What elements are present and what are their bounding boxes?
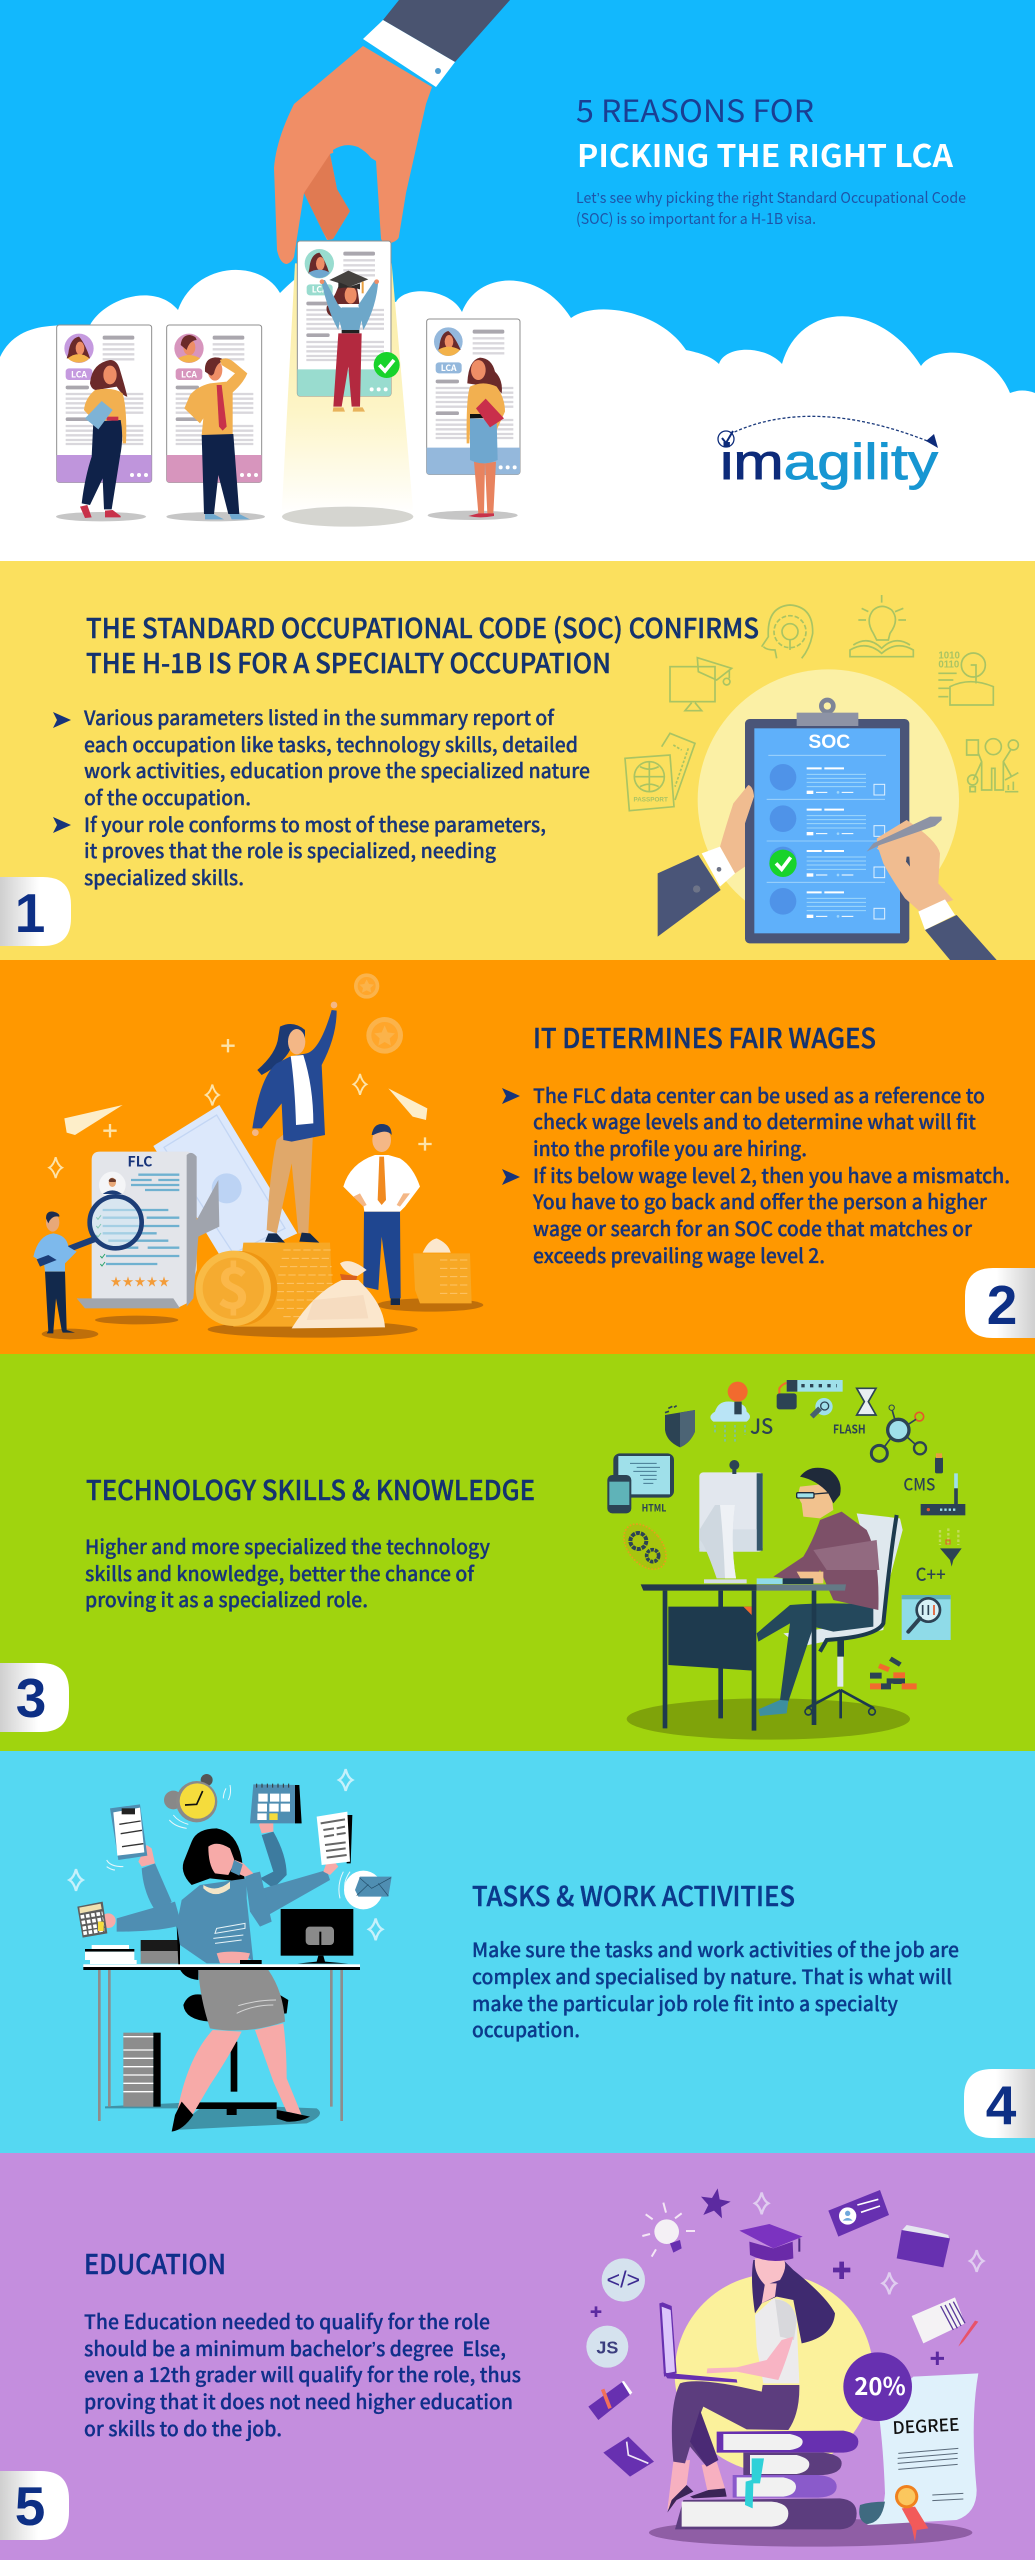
subtitle: Let’s see why picking the right Standard Occupational Code <box>576 187 966 208</box>
body text <box>85 1531 490 1613</box>
card 1 with woman <box>56 325 152 521</box>
body text: skills and knowledge, better the chance of <box>85 1558 475 1587</box>
banknote <box>153 1105 297 1267</box>
imagility logo <box>718 416 938 490</box>
chair <box>783 1513 903 1718</box>
body text: even a 12th grader will qualify for the role, thus <box>84 2359 521 2388</box>
heading: THE H-1B IS FOR A SPECIALTY OCCUPATION <box>86 642 611 681</box>
SOC illustration <box>625 595 1018 960</box>
man <box>757 1468 879 1716</box>
FLC document: FLC <box>128 1152 152 1172</box>
tech icons: JS <box>750 1409 773 1439</box>
20 percent badge: 20% <box>854 2367 906 2402</box>
bullet list: exceeds prevailing wage level 2. <box>533 1240 825 1269</box>
degree scroll <box>859 2373 978 2542</box>
body text <box>84 2306 521 2442</box>
title: 5 REASONS FOR <box>576 86 814 131</box>
panel: hero header <box>0 0 1035 561</box>
heading <box>86 607 759 681</box>
body text: proving it as a specialized role. <box>85 1584 368 1613</box>
heading: THE STANDARD OCCUPATIONAL CODE (SOC) CONFIRMS <box>86 607 759 646</box>
outline icons: 0110 <box>938 659 959 670</box>
FLC document <box>48 1152 219 1308</box>
tech icons: FLASH <box>833 1420 866 1437</box>
icon: green check <box>374 352 400 378</box>
number badge 4: 4 <box>986 2074 1017 2136</box>
FLC document: ★★★★★ <box>110 1275 170 1291</box>
bullet list: check wage levels and to determine what will fit <box>533 1106 976 1135</box>
developer at desk illustration <box>607 1380 965 1740</box>
hand picking a card <box>274 0 510 264</box>
left hand holding clipboard <box>658 785 754 937</box>
paper planes <box>64 1088 427 1135</box>
20 percent badge <box>843 2352 912 2421</box>
clipboard <box>698 669 959 943</box>
number badge 3 <box>0 1663 69 1732</box>
bullet list: it proves that the role is specialized, needing <box>84 835 496 864</box>
bullet list <box>502 1080 1010 1269</box>
card 4 with woman <box>427 319 520 520</box>
sparkles <box>49 1074 366 1178</box>
desk top <box>83 1964 360 1967</box>
chair <box>177 1925 288 2115</box>
desk <box>641 1578 846 1731</box>
body text: complex and specialised by nature. That is what will <box>472 1961 952 1990</box>
body text: occupation. <box>472 2014 580 2043</box>
spotlight beam <box>282 263 413 527</box>
bullet list: If your role conforms to most of these parameters, <box>84 809 546 838</box>
woman on coins <box>252 1002 337 1243</box>
resume cards and candidates <box>56 241 520 527</box>
card 2 with man <box>166 325 265 521</box>
clipboard: SOC <box>808 732 850 753</box>
body text: make the particular job role fit into a specialty <box>472 1988 898 2017</box>
bullet list: If its below wage level 2, then you have a mismatch. <box>533 1160 1010 1189</box>
gold coins: $ <box>217 1243 250 1325</box>
heading: EDUCATION <box>84 2243 226 2282</box>
graduate illustration <box>586 2188 983 2547</box>
tech icons: CMS <box>903 1472 935 1496</box>
heading: TASKS & WORK ACTIVITIES <box>472 1875 795 1914</box>
outline icons: 1010 <box>938 650 960 661</box>
panel 1: SOC specialty occupation <box>0 561 1035 960</box>
stacked books <box>675 2431 858 2529</box>
bullet list: wage or search for an SOC code that matches or <box>533 1213 973 1242</box>
body text: The Education needed to qualify for the role <box>84 2306 490 2335</box>
body text: should be a minimum bachelor’s degree Else, <box>84 2333 506 2362</box>
number badge 1 <box>0 877 71 946</box>
outline icons: PASSPORT <box>633 797 668 804</box>
man in white shirt <box>343 1124 420 1305</box>
number badge 2: 2 <box>987 1274 1017 1336</box>
bullet list: specialized skills. <box>84 862 244 891</box>
floating icons <box>586 2188 983 2477</box>
bullet list: into the profile you are hiring. <box>533 1133 807 1162</box>
money bag <box>292 1261 385 1328</box>
bullet list: The FLC data center can be used as a reference to <box>533 1080 985 1109</box>
body text: Make sure the tasks and work activities of the job are <box>472 1934 959 1963</box>
title: PICKING THE RIGHT LCA <box>577 131 953 176</box>
heading: TECHNOLOGY SKILLS & KNOWLEDGE <box>86 1469 535 1508</box>
card 1 with woman: LCA <box>71 368 87 380</box>
tech icons: C++ <box>916 1561 946 1587</box>
panel 3: technology skills <box>0 1354 1035 1751</box>
degree scroll: DEGREE <box>892 2411 960 2439</box>
clipboard <box>110 1804 147 1860</box>
card 3 selected with graduate <box>297 241 400 412</box>
coins in the air <box>354 973 403 1054</box>
number badge 1: 1 <box>15 882 45 944</box>
monitor <box>699 1460 763 1583</box>
woman <box>83 1808 360 2132</box>
number badge 4 <box>964 2069 1035 2138</box>
calculator <box>77 1902 107 1938</box>
tech icons <box>607 1380 965 1689</box>
bullet list: Various parameters listed in the summary report of <box>83 702 555 731</box>
sparkles <box>69 1769 382 1940</box>
subtitle <box>576 187 966 229</box>
number badge 3: 3 <box>16 1667 46 1729</box>
woman with laptop <box>659 2224 835 2513</box>
number badge 2 <box>965 1268 1035 1338</box>
bullet list: of the occupation. <box>84 782 251 811</box>
number badge 5 <box>0 2471 69 2540</box>
card 4 with woman: LCA <box>441 362 457 374</box>
body text: or skills to do the job. <box>84 2413 282 2442</box>
floating icons: </> <box>606 2267 640 2293</box>
panel 2: fair wages <box>0 960 1035 1354</box>
body text: proving that it does not need higher education <box>84 2386 513 2415</box>
panel 4: tasks and work activities <box>0 1751 1035 2153</box>
outline icons <box>625 595 1018 811</box>
bullet list <box>53 702 590 891</box>
tech icons: HTML <box>642 1499 667 1514</box>
panel 5: education <box>0 2153 1035 2560</box>
subtitle: (SOC) is so important for a H-1B visa. <box>576 208 816 229</box>
bullet list: each occupation like tasks, technology skills, detailed <box>84 729 578 758</box>
card 2 with man: LCA <box>181 368 197 380</box>
body text: Higher and more specialized the technology <box>85 1531 490 1560</box>
heading: IT DETERMINES FAIR WAGES <box>533 1017 876 1056</box>
multitasking woman illustration <box>69 1769 392 2132</box>
right hand with pen <box>867 817 997 960</box>
gold coins <box>196 1238 472 1327</box>
floating icons: JS <box>596 2337 618 2357</box>
small man with magnifier <box>33 1212 77 1333</box>
alarm clock <box>107 1774 350 1898</box>
bullet list: You have to go back and offer the person a higher <box>532 1186 988 1215</box>
imagility logo: imagility <box>720 434 938 490</box>
bullet list: work activities, education prove the specialized nature <box>84 755 590 784</box>
cloud <box>0 270 1035 561</box>
body text <box>472 1934 959 2043</box>
envelope <box>344 1871 392 1909</box>
desk and computer <box>85 1909 353 2121</box>
wages illustration <box>33 973 483 1339</box>
document <box>317 1812 352 1865</box>
card 3 selected with graduate: LCA <box>312 284 328 296</box>
title <box>576 86 953 176</box>
number badge 5: 5 <box>15 2475 45 2537</box>
calendar <box>250 1784 302 1823</box>
